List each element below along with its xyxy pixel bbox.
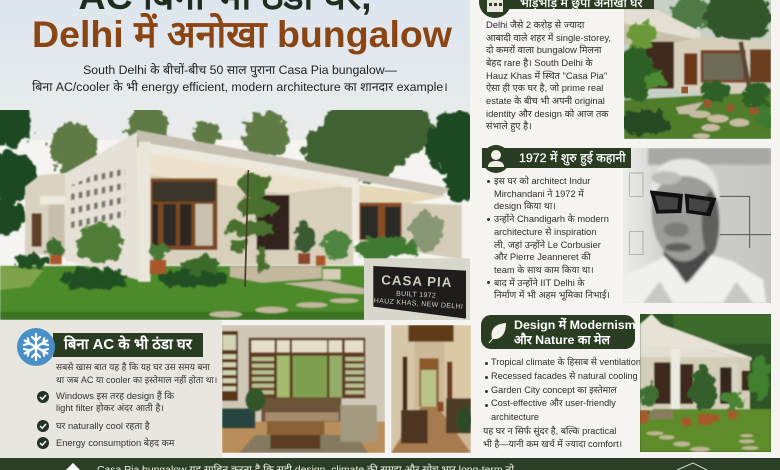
heading: modernism and nature: Design में Modernism [514,318,636,332]
bullet list: story: और Pierre Jeanneret की [494,252,591,262]
check item: windows: light filter होकर अंदर आती है। [56,403,164,413]
bullet list: design: architecture [491,412,539,422]
bullet list: design [485,356,641,422]
icon: snowflake [17,328,55,366]
body text: hidden house: Hauz Khas में स्थित "Casa Pia" [486,70,607,81]
stepping stones [209,298,359,318]
panel heading: cool house: बिना AC के भी ठंडा घर [64,337,192,353]
bullet list: story: design किया था। [494,201,556,211]
heading: 1972 [482,148,631,168]
photo: hallway [391,325,471,453]
roof and fascia [137,130,450,196]
photo: portrait of architect [623,148,771,303]
check item: natural cooling [37,420,150,432]
right wing [359,185,447,205]
planters [150,260,166,274]
steps [230,267,322,283]
subtitle: South Delhi के बीचों-बीच 50 साल पुराना Casa Pia bungalow— [83,63,397,77]
checklist [37,390,174,449]
intro text: cool house: था जब AC या cooler का इस्तेमाल नहीं होता था। [56,375,217,385]
check item: windows [37,390,174,413]
bullet list: story: ली, जहां उन्होंने Le Corbusier [494,240,601,250]
body text: hidden house: identity और design को आज तक [486,108,608,119]
body text: hidden house: Delhi जैसे 2 करोड़ से ज्यादा [486,19,584,30]
bullet list: story: Mirchandani ने 1972 में [494,189,584,199]
subtitle [32,63,448,94]
heading: modernism and nature [481,315,635,349]
body text: hidden house: आबादी वाले शहर में single-storey, [486,32,611,43]
icon: person [485,145,507,173]
check item: natural cooling: घर naturally cool रहता है [56,421,150,431]
bullet list: design: Cost-effective और user-friendly [491,398,616,408]
windows [151,178,217,250]
icon: building [479,0,510,18]
trees [0,97,488,235]
body text: hidden house: दो कमरों वाला bungalow मिलना [486,44,601,55]
title: Delhi में अनोखा bungalow [32,13,452,55]
side wing [25,173,65,257]
check item: energy: Energy consumption बेहद कम [56,438,174,448]
closing text: design: यह घर न सिर्फ सुंदर है, बल्कि practical [483,426,616,436]
bullet list: story: निर्माण में भी अहम भूमिका निभाई। [494,290,610,300]
bullet list: story [487,176,610,300]
back wall [150,173,353,265]
body text: hidden house: बेहद rare है। South Delhi के [486,57,593,68]
bullet list: story: उन्होंने Chandigarh के modern [494,214,609,224]
bullet list: design: Garden City concept का इस्तेमाल [491,385,617,395]
bullet list: story: बाद में उन्होंने IIT Delhi के [494,278,585,288]
bullet list: story: इस घर को architect Indur [494,176,590,186]
bullet list: design: Tropical climate के हिसाब से ventilation [491,357,641,367]
hero sky background [0,0,470,140]
sign: Casa Pia: HAUZ KHAS, NEW DELHI [374,298,463,311]
section: story from 1972 [18,145,631,466]
photo: garden and courtyard [624,0,771,139]
hero photo: Casa Pia bungalow [0,110,470,401]
pillars [138,142,150,282]
photo: veranda and lawn [640,314,771,452]
section: hidden house [479,0,654,132]
sign: Casa Pia [364,258,470,320]
shrubs [17,172,443,288]
icon: house marker [66,463,80,470]
intro text: cool house [56,362,217,385]
bottom banner [0,458,780,470]
sign: Casa Pia: BUILT 1972 [396,291,436,300]
porch ceiling [150,153,352,193]
bullet list: story: team के साथ काम किया था। [494,265,594,275]
heading: 1972: 1972 में शुरु हुई कहानी [519,151,626,165]
panel: cool house without AC [0,320,222,458]
panel heading: cool house [53,333,203,357]
check item: windows: Windows इस तरह design हैं कि [56,391,174,401]
body text: hidden house: संभाले हुए है। [486,120,532,131]
intro text: cool house: सबसे खास बात यह है कि यह घर उस समय बना [56,362,210,372]
section: modernism and nature [481,315,641,449]
icon: leaf [488,323,506,344]
body text: hidden house [486,19,611,132]
bullet list: story: architecture से inspiration [494,227,596,237]
closing text: design [483,426,622,449]
sign: Casa Pia: CASA PIA [381,272,453,290]
closing text: design: भी है—यानी कम खर्च में ज्यादा comfort। [483,439,622,449]
heading: modernism and nature: और Nature का मेल [514,332,610,346]
icon: house outline [676,462,708,470]
grass [0,266,367,320]
photo: living room [222,325,385,453]
wall with perforated screen [65,132,139,280]
small tree [225,172,277,273]
subtitle: बिना AC/cooler के भी energy efficient, modern architecture का शानदार example। [32,80,448,94]
body text: hidden house: ऐसा ही एक घर है, जो prime real [486,82,603,93]
body text: hidden house: estate के बीच भी अपनी original [486,95,605,106]
bullet list: design: Recessed facades से natural cooling [491,371,638,381]
